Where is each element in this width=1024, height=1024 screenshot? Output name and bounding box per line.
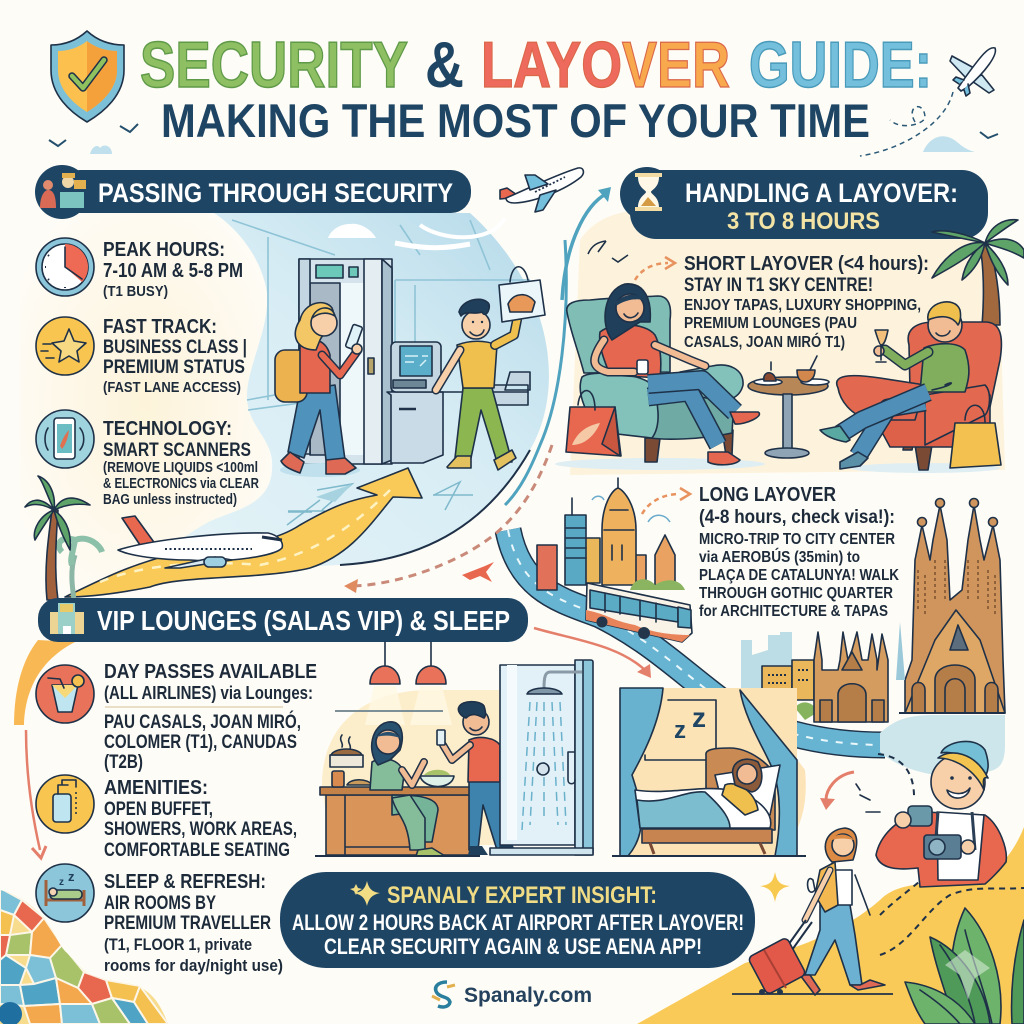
short layover text xyxy=(684,253,929,351)
item: amenities: AMENITIES: xyxy=(104,777,208,799)
item: fast track: (FAST LANE ACCESS) xyxy=(103,379,241,396)
dashed trail on swoosh xyxy=(880,870,1024,955)
city background xyxy=(741,622,905,720)
item: sleep and refresh xyxy=(36,864,283,975)
item: sleep and refresh: (T1, FLOOR 1, private xyxy=(104,935,252,954)
floor shadow xyxy=(280,463,360,477)
building: red xyxy=(537,545,557,590)
palm left xyxy=(25,476,102,600)
red shopping bag xyxy=(566,391,621,456)
table with bags xyxy=(436,372,530,405)
icon: ceiling lamps xyxy=(365,642,452,725)
logo: spanaly: Spanaly.com xyxy=(464,984,592,1007)
icon: sparkle xyxy=(760,872,790,902)
item: technology xyxy=(36,410,259,508)
item: technology: & ELECTRONICS via CLEAR xyxy=(103,476,259,492)
teal armchair with woman xyxy=(555,284,765,470)
skyline xyxy=(537,478,685,590)
item: peak hours: 7-10 AM & 5-8 PM xyxy=(103,260,243,282)
icon: soap bottle xyxy=(36,775,94,833)
item: peak hours: (T1 BUSY) xyxy=(103,283,168,300)
cloud xyxy=(328,224,376,238)
item: day passes: COLOMER (T1), CANUDAS xyxy=(104,732,297,753)
plants bottom right xyxy=(905,908,1024,1024)
arrow: curved down xyxy=(820,772,854,810)
icon: bed: z xyxy=(68,869,75,884)
building: yellow xyxy=(585,538,600,583)
icon: clock xyxy=(36,238,94,296)
short layover text: ENJOY TAPAS, LUXURY SHOPPING, xyxy=(684,297,921,314)
icon: star xyxy=(36,317,94,375)
arrow: yellow runway xyxy=(65,468,422,597)
counter xyxy=(320,787,475,855)
icon: hotel xyxy=(50,603,84,634)
icon: plane top right xyxy=(950,48,995,96)
water at cathedral base xyxy=(880,715,1005,776)
item: amenities: OPEN BUFFET, xyxy=(104,799,213,820)
cafe table xyxy=(748,356,829,458)
icon: phone scanner xyxy=(36,410,94,468)
item: technology: SMART SCANNERS xyxy=(103,440,251,461)
item: sleep and refresh: PREMIUM TRAVELLER xyxy=(104,913,271,934)
photographer xyxy=(856,741,1006,887)
woman eating xyxy=(370,722,445,856)
dashed flight trail xyxy=(860,92,953,156)
mosaic bottom left xyxy=(0,890,168,1024)
long layover text: (4-8 hours, check visa!): xyxy=(699,507,895,528)
title xyxy=(140,28,932,147)
long layover text xyxy=(699,484,899,620)
icon: shield xyxy=(51,31,124,122)
clouds and birds xyxy=(49,124,998,154)
metal detector xyxy=(299,259,392,464)
traveller woman with phone xyxy=(275,303,363,474)
item: amenities xyxy=(36,775,297,861)
clear bag xyxy=(499,267,545,322)
item: technology: TECHNOLOGY: xyxy=(103,418,232,440)
plane top centre xyxy=(500,168,583,212)
building: blue tower xyxy=(565,498,586,585)
man seated xyxy=(920,344,969,392)
airliner over runway xyxy=(118,516,282,568)
title: LAYOVER xyxy=(481,28,730,101)
red armchair with man xyxy=(820,302,1001,473)
section header: passing through security xyxy=(35,165,471,219)
icon: bed xyxy=(36,864,94,922)
long layover text: THROUGH GOTHIC QUARTER xyxy=(699,585,893,602)
title: SECURITY xyxy=(140,28,408,101)
yellow shopping bag xyxy=(950,405,1001,468)
item: peak hours xyxy=(36,238,243,300)
dashed trail from road xyxy=(878,754,914,800)
title: MAKING THE MOST OF YOUR TIME xyxy=(161,94,870,147)
section header: vip lounges xyxy=(38,598,528,642)
short layover text: STAY IN T1 SKY CENTRE! xyxy=(684,275,873,296)
callout: expert insight: ALLOW 2 HOURS BACK AT AIRPORT AFTER LAYOVER! xyxy=(292,910,744,935)
item: fast track: BUSINESS CLASS | xyxy=(103,337,247,358)
layover peach area xyxy=(570,210,1005,475)
item: technology: BAG unless instructed) xyxy=(103,492,237,508)
item: amenities: COMFORTABLE SEATING xyxy=(104,840,290,861)
section header: handling a layover xyxy=(620,167,988,239)
section header: handling a layover: HANDLING A LAYOVER: xyxy=(685,178,958,208)
short layover text: SHORT LAYOVER (<4 hours): xyxy=(684,253,929,275)
section header: vip lounges: VIP LOUNGES (SALAS VIP) & SLEEP xyxy=(97,605,510,636)
traveller man with bag xyxy=(436,299,517,470)
building: clock tower xyxy=(655,535,675,585)
item: sleep and refresh: rooms for day/night use) xyxy=(104,956,283,975)
callout: expert insight: SPANALY EXPERT INSIGHT: xyxy=(387,882,657,909)
item: sleep and refresh: SLEEP & REFRESH: xyxy=(104,871,266,893)
shower xyxy=(490,660,593,855)
birds xyxy=(588,241,628,262)
panel: security illustration xyxy=(120,213,549,575)
long layover text: via AEROBÚS (35min) to xyxy=(699,547,860,566)
bedroom: z xyxy=(674,717,686,744)
section header: passing through security: PASSING THROUGH SECURITY xyxy=(98,178,453,208)
dashed arrow to short layover xyxy=(635,257,675,280)
callout: expert insight xyxy=(280,872,755,968)
item: day passes: DAY PASSES AVAILABLE xyxy=(104,661,317,683)
item: fast track xyxy=(36,316,247,396)
lounge buffet scene xyxy=(315,642,516,856)
short layover text: PREMIUM LOUNGES (PAU xyxy=(684,315,857,332)
icon: cocktail xyxy=(36,665,94,723)
icon: security staff xyxy=(40,173,86,208)
item: sleep and refresh: AIR ROOMS BY xyxy=(104,893,216,914)
icon: hourglass xyxy=(635,173,662,211)
title: GUIDE: xyxy=(749,28,932,101)
yellow swoosh bottom right xyxy=(637,827,1024,1024)
woman seated xyxy=(600,325,661,378)
icon: airport bus xyxy=(586,583,692,642)
title: & xyxy=(425,28,464,101)
dashed arrow from vip to plane xyxy=(344,445,552,593)
item: amenities: SHOWERS, WORK AREAS, xyxy=(104,819,297,840)
road to the city xyxy=(508,530,885,745)
item: peak hours: PEAK HOURS: xyxy=(103,239,225,261)
man with phone xyxy=(437,702,516,855)
walking woman with suitcase xyxy=(732,828,893,995)
sagrada familia xyxy=(899,498,1005,713)
dashed arrow to long layover xyxy=(642,488,690,514)
arrow: from vip to bedroom xyxy=(534,628,651,678)
gothic cathedral xyxy=(814,632,888,722)
item: day passes xyxy=(36,661,317,773)
bedroom xyxy=(612,688,806,856)
arrow: teal up to layover xyxy=(505,187,611,505)
icon: sparkles xyxy=(350,881,380,906)
building: torre glories xyxy=(602,478,636,585)
icon: small red plane xyxy=(462,562,494,582)
building: orange back xyxy=(632,555,646,585)
item: day passes: PAU CASALS, JOAN MIRÓ, xyxy=(104,711,301,733)
bushes xyxy=(630,579,685,590)
floor plane shadow xyxy=(287,482,473,525)
icon: bed: z xyxy=(59,877,64,888)
section header: handling a layover: 3 TO 8 HOURS xyxy=(727,208,880,235)
palm right xyxy=(932,220,1024,325)
item: fast track: PREMIUM STATUS xyxy=(103,357,245,378)
bedroom: z xyxy=(692,702,706,733)
item: day passes: (T2B) xyxy=(104,752,143,773)
item: technology: (REMOVE LIQUIDS <100ml xyxy=(103,460,258,476)
kiosk xyxy=(387,342,443,463)
item: day passes: (ALL AIRLINES) via Lounges: xyxy=(104,683,313,703)
short layover text: CASALS, JOAN MIRÓ T1) xyxy=(684,332,845,351)
arrow: orange and red left side xyxy=(14,640,75,858)
long layover text: for ARCHITECTURE & TAPAS xyxy=(699,603,888,620)
food trays xyxy=(330,735,454,787)
long layover text: PLAÇA DE CATALUNYA! WALK xyxy=(699,567,899,584)
left cream area xyxy=(20,213,270,590)
long layover text: LONG LAYOVER xyxy=(699,484,836,506)
callout: expert insight: CLEAR SECURITY AGAIN & USE AENA APP! xyxy=(324,934,702,959)
long layover text: MICRO-TRIP TO CITY CENTER xyxy=(699,531,895,548)
item: fast track: FAST TRACK: xyxy=(103,316,217,338)
